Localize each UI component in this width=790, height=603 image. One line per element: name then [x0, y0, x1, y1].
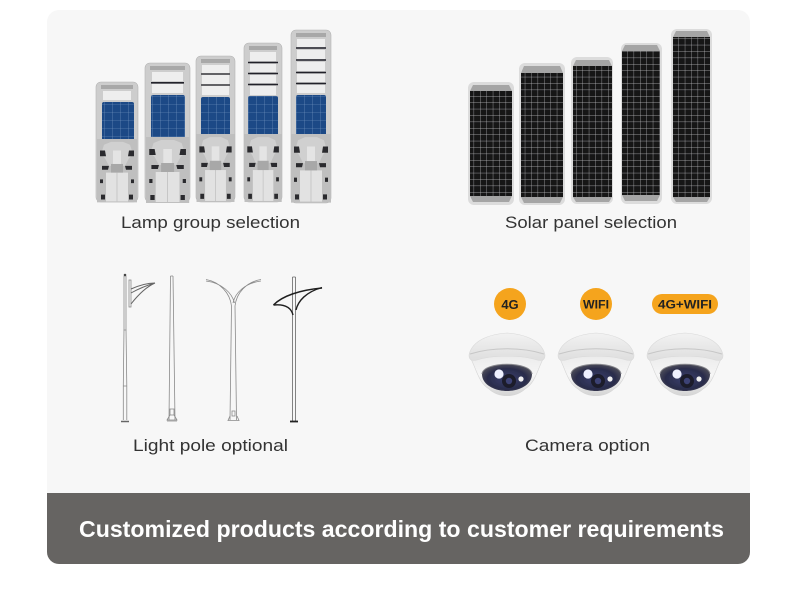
solar panel 2	[519, 63, 565, 205]
pole 2	[167, 276, 177, 421]
badge: 4G+WIFI	[652, 294, 718, 314]
solar panel 1	[468, 82, 514, 205]
label: camera option: Camera option	[525, 436, 650, 455]
camera 2	[558, 333, 634, 396]
solar panel 3	[571, 57, 613, 204]
solar panel 5	[671, 29, 712, 204]
lamp 3	[196, 56, 235, 202]
camera 3	[647, 333, 723, 396]
label: solar panel selection: Solar panel selection	[505, 213, 677, 232]
pole 4	[274, 277, 322, 422]
pole 3	[206, 280, 261, 420]
badge: WIFI: WIFI	[583, 298, 609, 312]
label: lamp group selection: Lamp group selection	[121, 213, 300, 232]
badge: WIFI	[580, 288, 612, 320]
camera 1	[469, 333, 545, 396]
lamp 4	[244, 43, 282, 202]
banner	[47, 493, 750, 564]
banner heading: Customized products according to customer requirements	[79, 516, 724, 542]
lamp 5	[291, 30, 331, 203]
image: camera options	[469, 288, 723, 396]
solar panel 4	[621, 43, 662, 204]
badge: 4G: 4G	[501, 297, 519, 312]
image: solar panel selection	[468, 29, 712, 205]
lamp 2	[145, 63, 190, 203]
image: light pole options	[121, 274, 322, 422]
badge: 4G	[494, 288, 526, 320]
image: lamp group selection	[96, 30, 331, 203]
lamp 1	[96, 82, 138, 202]
badge: 4G+WIFI: 4G+WIFI	[658, 298, 712, 312]
label: light pole optional: Light pole optional	[133, 436, 288, 455]
pole 1	[121, 274, 155, 422]
